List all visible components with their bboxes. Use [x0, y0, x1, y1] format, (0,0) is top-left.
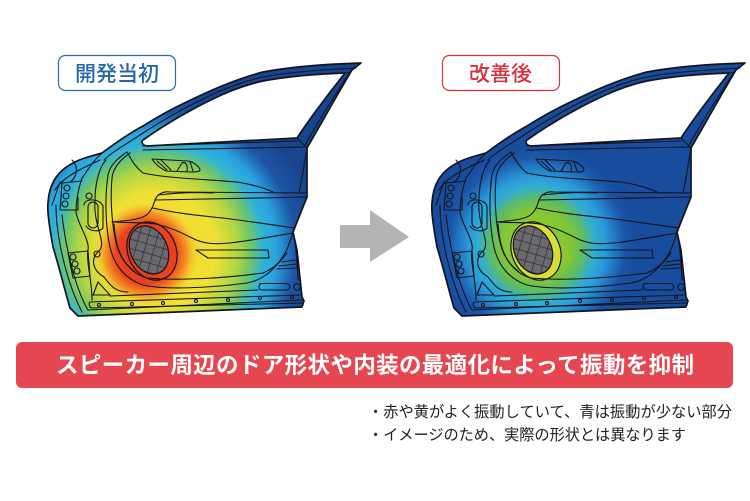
label: after improvement: 改善後 [469, 63, 532, 86]
notes: ・イメージのため、実際の形状とは異なります [368, 427, 686, 444]
label: initial development: 開発当初 [75, 63, 159, 86]
door outline before [48, 63, 361, 316]
speaker after [502, 214, 570, 288]
arrow: before to after [340, 210, 409, 262]
banner [16, 342, 733, 388]
label: after improvement [442, 56, 560, 90]
label: initial development [58, 56, 176, 90]
speaker before [118, 214, 186, 288]
notes [368, 404, 732, 444]
banner: スピーカー周辺のドア形状や内装の最適化によって振動を抑制 [56, 353, 694, 378]
door outline after [432, 63, 745, 316]
door heat map: before, high vibration [40, 55, 370, 325]
door heat map: after, low vibration [424, 55, 750, 325]
notes: ・赤や黄がよく振動していて、青は振動が少ない部分 [368, 404, 732, 421]
